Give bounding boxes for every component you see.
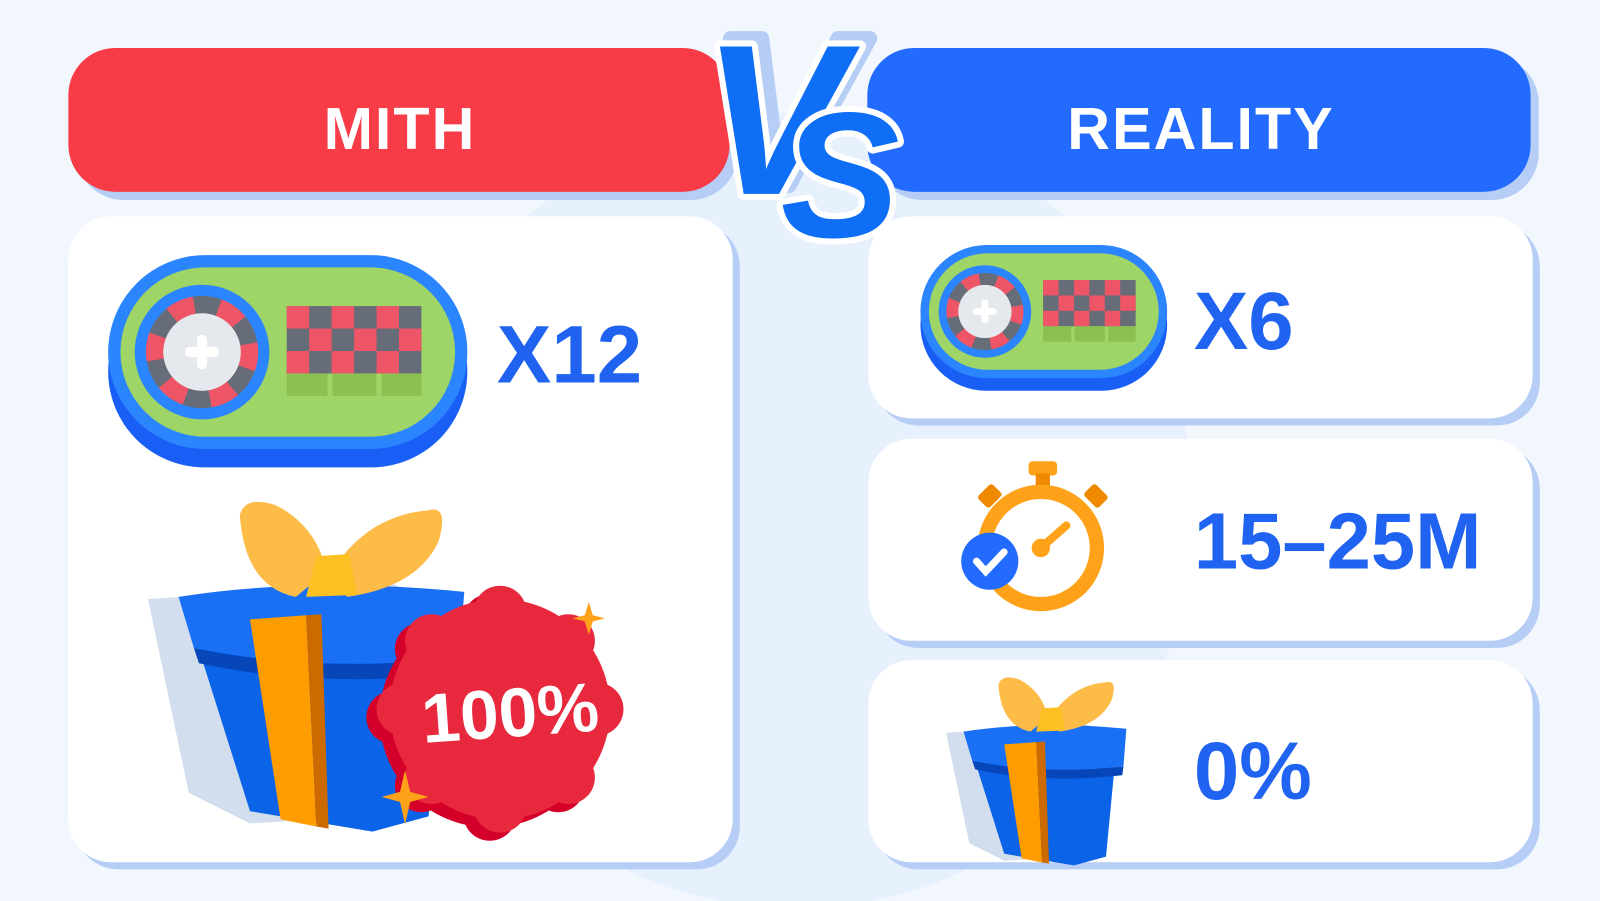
badge: 100% (366, 586, 623, 841)
VS emblem: V (702, 1, 860, 240)
icon: roulette table (108, 255, 467, 467)
panel: reality 0% (868, 660, 1540, 869)
heading: REALITY: REALITY (1067, 95, 1335, 162)
icon: small roulette (920, 245, 1167, 391)
heading: MITH: MITH (324, 95, 476, 162)
panel: reality time (868, 439, 1540, 648)
value: X6: X6 (1194, 276, 1294, 367)
panel: reality x6 (868, 216, 1540, 426)
background circle (398, 112, 1194, 901)
icon: big gift (148, 502, 464, 832)
header: mith (68, 48, 738, 200)
value: 0%: 0% (1194, 726, 1312, 817)
icon: stopwatch (961, 461, 1109, 611)
VS emblem (702, 0, 900, 275)
value: X12: X12 (497, 310, 642, 401)
panel: mith (68, 216, 740, 869)
header: reality (867, 48, 1539, 200)
icon: small gift (946, 677, 1126, 865)
badge: 100%: 100% (419, 668, 601, 758)
value: 15-25M: 15–25M (1194, 496, 1481, 585)
VS emblem: S (781, 75, 900, 275)
